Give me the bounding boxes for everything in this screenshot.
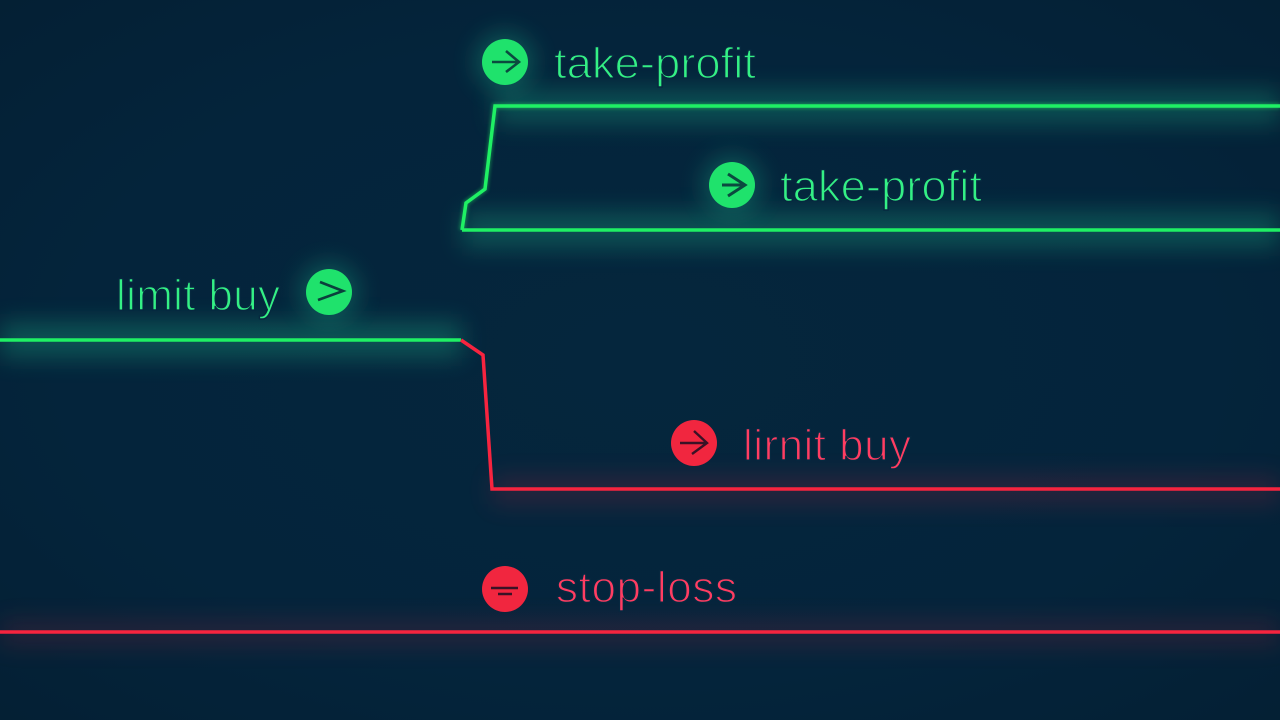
stop-loss line bbox=[0, 629, 1280, 635]
icon: stop-loss bbox=[482, 566, 528, 612]
label: stop-loss: stop-loss bbox=[556, 563, 737, 612]
icon: take-profit arrow, lower bbox=[709, 162, 755, 208]
line glows bbox=[0, 90, 1280, 646]
take-profit line, upper bbox=[462, 106, 1280, 230]
limit buy line, green bbox=[0, 337, 461, 343]
label: take-profit, upper: take-profit bbox=[554, 39, 756, 88]
label: limit buy, green: limit buy bbox=[116, 271, 280, 320]
take-profit line, lower bbox=[462, 227, 1280, 233]
icon glows bbox=[299, 32, 762, 322]
icon: take-profit arrow, upper bbox=[482, 39, 528, 85]
label: limit buy, red: lirnit buy bbox=[743, 421, 911, 470]
icon: limit buy chevron bbox=[306, 269, 352, 315]
icon: limit buy arrow, red bbox=[671, 420, 717, 466]
label: take-profit, lower: take-profit bbox=[780, 162, 982, 211]
limit buy line, red bbox=[461, 340, 1280, 489]
